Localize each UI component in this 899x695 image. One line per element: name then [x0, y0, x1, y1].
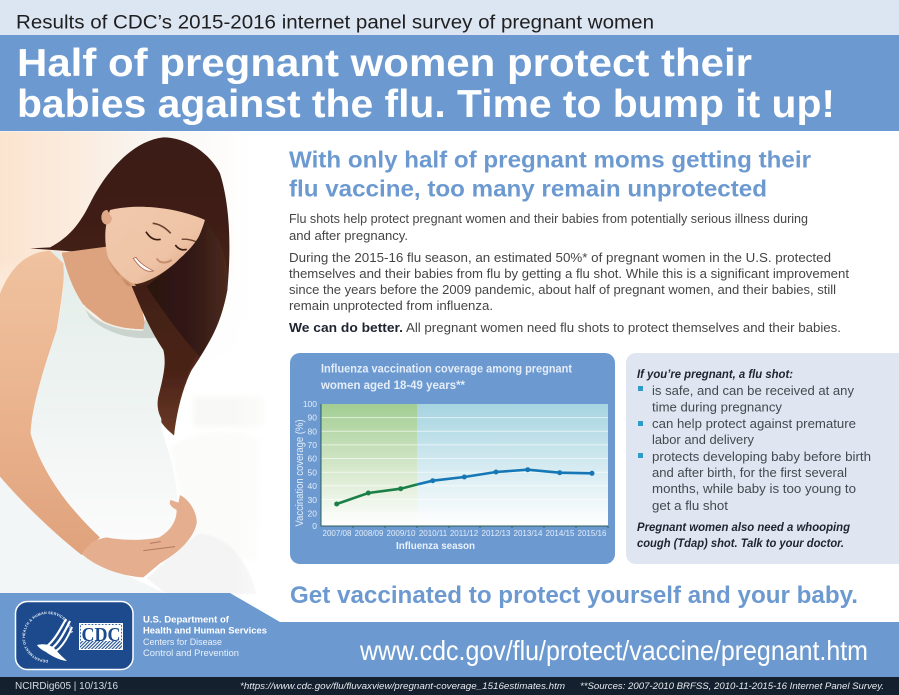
body text: Flu shots help protect pregnant women and their babies from potentially serious illness during: [289, 212, 808, 226]
hands: [82, 495, 197, 577]
whooping cough note: Pregnant women also need a whooping: [637, 520, 851, 534]
survey source banner: [0, 0, 899, 35]
title: babies against the flu. Time to bump it up!: [17, 83, 835, 126]
chart title: Influenza vaccination coverage among pregnant: [321, 362, 572, 376]
x axis labels: 2014/15: [546, 529, 575, 538]
x axis labels: 2015/16: [578, 529, 607, 538]
y axis labels: 100: [303, 399, 317, 409]
panel: vaccination coverage chart: [290, 353, 615, 564]
logo: HHS and CDC: [14, 600, 134, 670]
body text: themselves and their babies from flu by getting a flu shot. While this is a significant improvement: [289, 267, 850, 281]
hair back and top: [30, 137, 229, 435]
y axis labels: 80: [308, 426, 317, 436]
body text: [289, 212, 850, 335]
y axis title: Vaccination coverage (%): [294, 420, 306, 526]
footer notes: [0, 677, 899, 695]
bullet list: get a flu shot: [652, 499, 729, 513]
y axis labels: 40: [308, 481, 317, 491]
subheading: flu vaccine, too many remain unprotected: [289, 176, 767, 202]
face: [105, 207, 205, 284]
photo: pregnant woman looking down at her belly: [0, 131, 293, 597]
agency name: Control and Prevention: [143, 648, 239, 659]
footer notes: NCIRDig605 | 10/13/16: [15, 681, 118, 692]
subheading: With only half of pregnant moms getting their: [289, 146, 811, 172]
footer band: [0, 593, 899, 677]
title: [0, 35, 899, 131]
bullet list: protects developing baby before birth: [652, 450, 871, 464]
x axis title: Influenza season: [396, 540, 475, 552]
y axis labels: 70: [308, 440, 317, 450]
agency name: Centers for Disease: [143, 637, 222, 648]
y axis labels: 0: [312, 521, 317, 531]
x axis labels: 2013/14: [514, 529, 543, 538]
agency name: U.S. Department of: [143, 614, 230, 626]
footer notes: **Sources: 2007-2010 BRFSS, 2010-11-2015-16 Internet Panel Survey.: [580, 681, 884, 692]
bullet list: can help protect against premature: [652, 417, 856, 431]
body text: remain unprotected from influenza.: [289, 299, 493, 313]
y axis labels: [303, 399, 317, 531]
body text: since the years before the 2009 pandemic, about half of pregnant women, and their babies, still: [289, 283, 836, 297]
x axis labels: 2011/12: [450, 529, 479, 538]
whooping cough note: [637, 520, 851, 550]
bullet list: and after birth, for the first several: [652, 466, 847, 480]
chart title: women aged 18-49 years**: [320, 378, 465, 392]
body text: We can do better.: [289, 321, 403, 335]
body text: and after pregnancy.: [289, 229, 408, 243]
call to action: Get vaccinated to protect yourself and your baby.: [290, 582, 858, 609]
hair front: [132, 220, 217, 435]
y axis labels: 90: [308, 413, 317, 423]
bullet list: [638, 384, 871, 513]
CDC mark: CDC: [82, 624, 120, 646]
body text: During the 2015-16 flu season, an estimated 50%* of pregnant women in the U.S. protected: [289, 251, 831, 265]
HHS seal: DEPARTMENT OF HEALTH & HUMAN SERVICES • USA: [22, 612, 74, 662]
whooping cough note: cough (Tdap) shot. Talk to your doctor.: [637, 536, 844, 550]
y axis labels: 30: [308, 495, 317, 505]
agency name: [143, 614, 267, 659]
x axis labels: 2009/10: [387, 529, 416, 538]
tank top: [31, 251, 177, 540]
y axis labels: 60: [308, 454, 317, 464]
y axis labels: 50: [308, 467, 317, 477]
line chart plot: [321, 404, 608, 528]
survey source banner: Results of CDC’s 2015-2016 internet panel survey of pregnant women: [16, 12, 654, 34]
title: Half of pregnant women protect their: [17, 42, 752, 85]
y axis labels: 20: [308, 508, 317, 518]
bullet list: labor and delivery: [652, 433, 755, 447]
agency name: Health and Human Services: [143, 626, 267, 636]
x axis labels: 2008/09: [355, 529, 384, 538]
bullet list: time during pregnancy: [652, 400, 783, 414]
x axis labels: 2007/08: [323, 529, 352, 538]
bullet list: is safe, and can be received at any: [652, 384, 855, 398]
subheading: [289, 146, 811, 202]
body text: All pregnant women need flu shots to protect themselves and their babies.: [406, 321, 841, 335]
bullet list: months, while baby is too young to: [652, 482, 856, 496]
x axis labels: 2012/13: [482, 529, 511, 538]
arm and shoulder: [0, 251, 100, 555]
x axis labels: [323, 529, 607, 538]
x axis labels: 2010/11: [419, 529, 448, 538]
neck and chest: [62, 247, 147, 330]
footer notes: *https://www.cdc.gov/flu/fluvaxview/pregnant-coverage_1516estimates.htm: [240, 681, 565, 692]
chart title: [320, 362, 572, 392]
panel heading: If you’re pregnant, a flu shot:: [637, 367, 793, 381]
panel: flu shot benefits: [626, 353, 899, 564]
